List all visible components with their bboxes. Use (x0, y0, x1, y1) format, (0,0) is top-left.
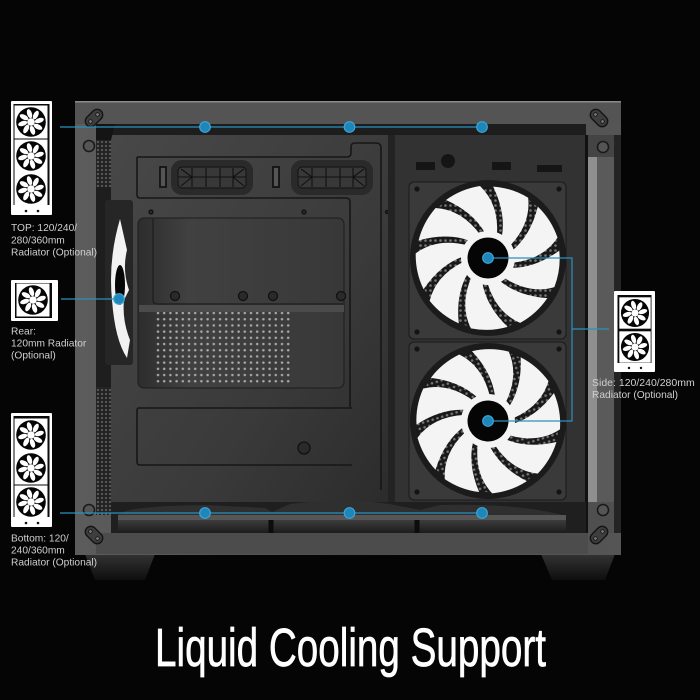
top radiator label: 280/360mm (11, 236, 65, 246)
side radiator label: Radiator (Optional) (592, 390, 678, 401)
window inner step (153, 219, 343, 304)
left foot (85, 554, 155, 580)
motherboard window (138, 218, 344, 388)
left compartment back panel (111, 135, 388, 535)
rear radiator icon (11, 280, 58, 321)
cable cutout band (137, 157, 350, 407)
top radiator label: Radiator (Optional) (11, 248, 97, 258)
fan frame screws (414, 186, 562, 495)
rear radiator label: 120mm Radiator (11, 338, 87, 350)
bottom fans (111, 500, 586, 533)
right glass pillar (585, 135, 621, 533)
left side mesh strip (96, 135, 111, 515)
bottom rail (96, 533, 588, 554)
side radiator label: Side: 120/240/280mm (592, 377, 695, 389)
right compartment (395, 135, 586, 533)
case frame (75, 101, 621, 555)
side fan bottom (389, 318, 592, 522)
top radiator label: TOP: 120/240/ (11, 223, 77, 234)
corner shadow (96, 124, 115, 140)
bottom radiator label: Radiator (Optional) (11, 558, 97, 568)
grommet left (171, 160, 253, 195)
bottom radiator icon (11, 413, 52, 527)
callout lines (60, 127, 609, 513)
rear radiator label: Rear: (11, 326, 36, 338)
side fan bottom frame (409, 342, 566, 500)
PC case (75, 101, 621, 580)
window ledge (139, 305, 344, 312)
top radiator icon (11, 101, 52, 215)
side fan top frame (409, 182, 566, 339)
standoff screws (149, 210, 388, 454)
rear radiator label: (Optional) (11, 350, 56, 362)
top rail (75, 101, 621, 124)
lower plate outline (137, 408, 352, 465)
motherboard tray outline (137, 143, 381, 490)
case top edge highlight (75, 101, 621, 102)
right foot (541, 554, 615, 580)
bottom radiator label: 240/360mm (11, 546, 65, 556)
callout dots (114, 122, 493, 518)
bottom radiator label: Bottom: 120/ (11, 534, 69, 544)
rear fan side view (105, 200, 133, 365)
side fan top (410, 176, 571, 340)
right compartment top details (416, 154, 562, 172)
title: Liquid Cooling Support (155, 618, 546, 678)
grommet right (291, 160, 373, 195)
corner brackets (83, 107, 610, 546)
side radiator icon (614, 291, 655, 372)
perforated vents (156, 312, 292, 386)
compartment divider (388, 135, 395, 533)
left mesh cover (96, 187, 111, 387)
cable tie slots (160, 167, 279, 187)
top inner shadow (96, 124, 586, 135)
